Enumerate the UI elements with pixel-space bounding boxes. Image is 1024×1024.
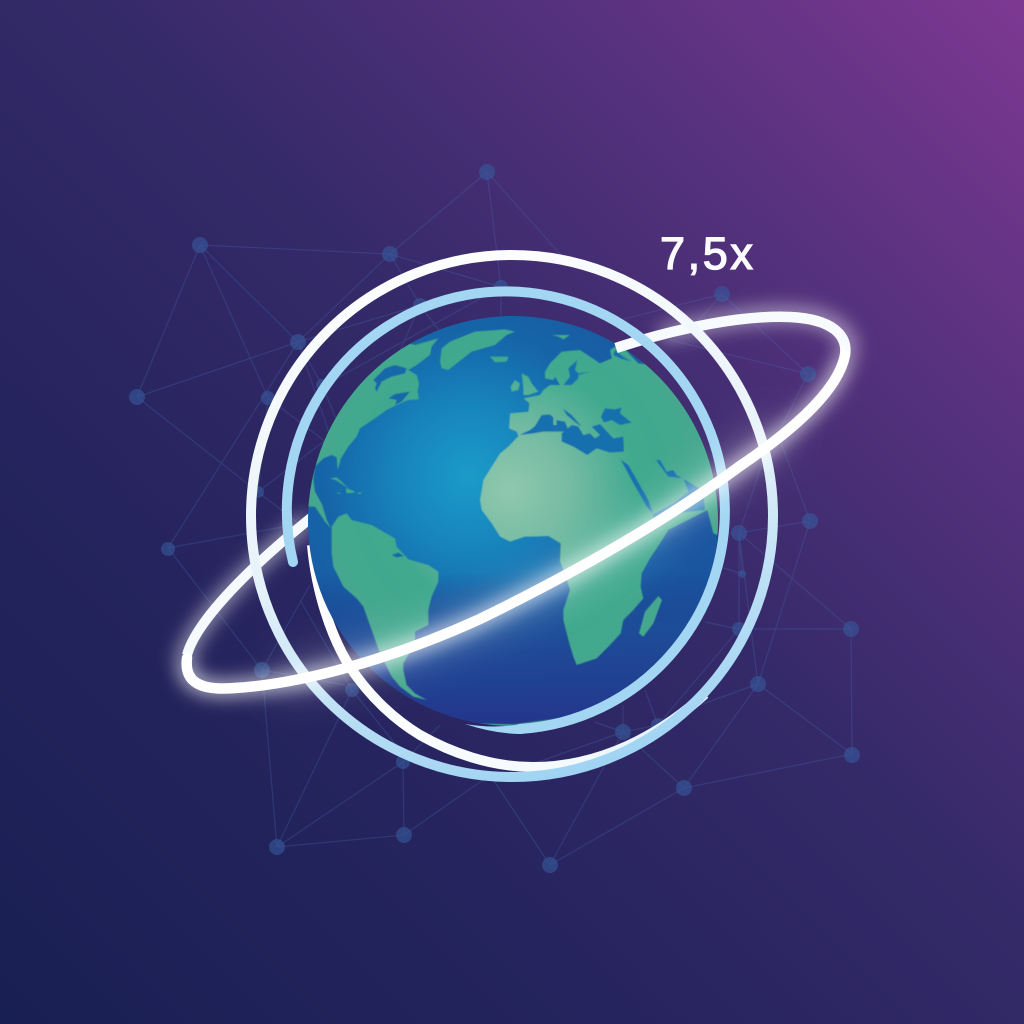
light blue orbit ring xyxy=(287,291,725,734)
globe xyxy=(300,310,730,740)
globe ocean xyxy=(300,310,730,740)
outer orbit ring xyxy=(251,255,773,777)
South America xyxy=(332,513,438,700)
continents xyxy=(305,329,730,740)
Antarctica sliver xyxy=(467,717,567,740)
Amazon mouth xyxy=(392,553,404,557)
North America xyxy=(305,338,438,528)
Africa and Eurasia xyxy=(480,347,730,665)
Hudson Bay and St Lawrence xyxy=(373,365,410,405)
Madagascar xyxy=(639,596,662,637)
Iceland, Britain, Ireland, Svalbard xyxy=(490,335,570,395)
Caribbean islands xyxy=(330,477,362,494)
orbit: upper back arc crossing the globe xyxy=(616,315,849,355)
multiplier label 7,5x: 7,5x xyxy=(660,228,755,279)
orbit: hidden back part behind the globe xyxy=(184,517,312,660)
Greenland xyxy=(440,329,515,370)
Corsica and Sardinia xyxy=(553,415,557,425)
inner white spiral ring, emerging from behind the globe xyxy=(312,545,705,767)
Mediterranean, Black Sea, Red Sea, Gulf, Baltic xyxy=(519,350,705,520)
orbit: front arc with glow xyxy=(186,355,845,689)
network of connected nodes xyxy=(129,164,860,873)
